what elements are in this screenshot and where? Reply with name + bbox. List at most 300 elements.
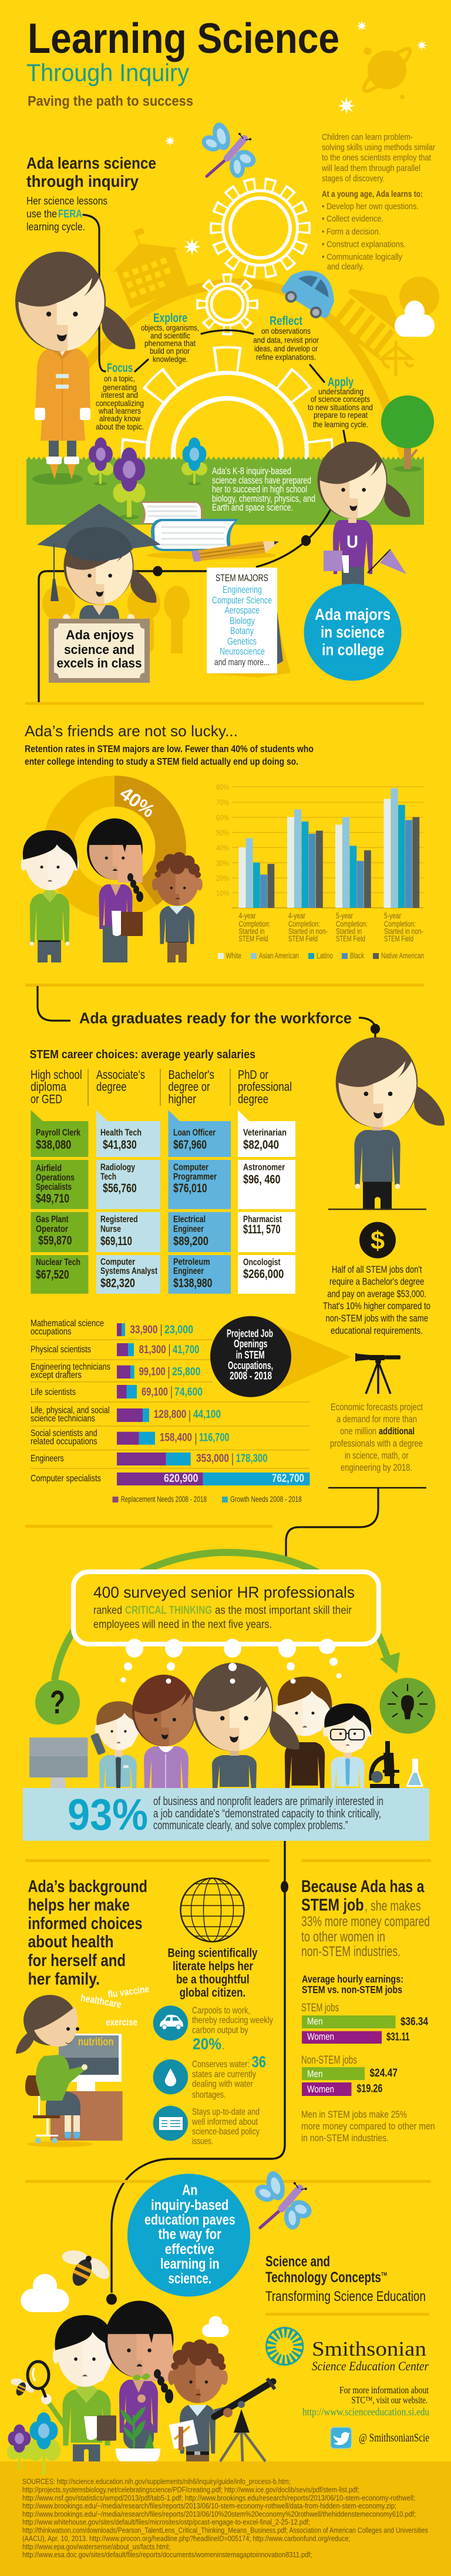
FERA path lines (83, 215, 346, 444)
axis labels: 70% (216, 798, 229, 807)
labels: Focus: Focus (107, 361, 133, 375)
category labels: Completion: (336, 920, 368, 928)
flowers (7, 2413, 60, 2475)
panel: STEM majors sign: Neuroscience (220, 646, 265, 657)
diploma sign (49, 619, 150, 683)
tagline: Paving the path to success (28, 93, 193, 109)
computer monitor (29, 1738, 87, 1788)
column: PhD careers: Veterinarian (243, 1128, 287, 1138)
divider (265, 2313, 429, 2316)
callout: HR professionals box: employees will need in the next five years. (93, 1619, 272, 1631)
icon: question mark circle (35, 1680, 80, 1725)
column: associate's careers: Systems Analyst (100, 1266, 158, 1276)
growth values (164, 1324, 268, 1465)
diploma sign: Ada enjoys (66, 628, 134, 642)
panel: STEM majors sign: Genetics (227, 636, 257, 647)
panel: STEM majors sign: and many more... (214, 658, 270, 668)
legend: Black (350, 951, 364, 960)
legend: Latino (317, 951, 333, 960)
text: K-8 preparation: her to succeed in high school (212, 484, 307, 495)
panel: sources footer: http://www.brookings.edu/~/media/research/files/reports/2013/06/10%20stem%20economy%20rothwell/thehiddenstemeconomy610.pdf; (22, 2510, 416, 2518)
divider (25, 2180, 431, 2183)
labels: Apply: the learning cycle. (313, 420, 368, 429)
panel: STEM majors sign: Biology (230, 615, 255, 626)
callout: HR professionals box: as the most important skill their (215, 1605, 352, 1617)
text: carpool: . (222, 2042, 224, 2052)
intro text: problem solving: • Construct explanations. (322, 240, 406, 249)
text: half of STEM jobs (323, 1264, 430, 1336)
table column headers: or GED (31, 1093, 62, 1106)
chart: hourly earnings: Women (307, 2031, 334, 2042)
chart: projected job openings (31, 1319, 310, 1504)
labels: Focus: already know (99, 414, 141, 423)
text: half of STEM jobs: and pay on average $53,000. (327, 1289, 426, 1300)
text: half of STEM jobs: educational requirements. (331, 1326, 423, 1336)
panel: sources footer (0, 2461, 451, 2576)
labels: Focus: interest and (101, 390, 138, 400)
text: economic forecasts: professionals with a degree (330, 1438, 423, 1449)
characters: three friends (21, 819, 203, 962)
heading: salaries: STEM career choices: average yearly salaries (29, 1048, 255, 1061)
bars group 2 (287, 810, 323, 908)
table column headers: degree or (168, 1081, 210, 1094)
labels: Explore: build on prior (150, 346, 190, 355)
icon: telescope (355, 1353, 400, 1394)
table column headers: higher (168, 1093, 196, 1106)
callout: inquiry-based education: effective (165, 2241, 214, 2258)
growth values: 116,700 (199, 1432, 229, 1444)
icon: dragonfly (252, 2169, 315, 2230)
panel: sources footer: http://www.epa.gov/watersense/about_us/facts.html; (22, 2543, 170, 2551)
column: high school careers: Nuclear Tech (36, 1257, 80, 1267)
text: water: shortages. (192, 2090, 226, 2100)
callout: projected job openings: Occupations, (228, 1360, 273, 1371)
heading: Ada's background: Ada’s background (28, 1877, 147, 1896)
chart: hourly earnings: Men (307, 2068, 323, 2079)
panel: 93 percent statistic: communicate clearly, and solve complex problems.” (153, 1819, 348, 1832)
icon: microscope (370, 1741, 399, 1788)
divider (25, 1525, 272, 1528)
decorative stars and planet (164, 21, 428, 256)
table column headers: PhD or (238, 1068, 268, 1082)
labels: Explore: and scientific (150, 331, 190, 340)
column: PhD careers: Astronomer (243, 1163, 285, 1173)
intro text: problem solving: At a young age, Ada learns to: (322, 190, 423, 199)
panel: 93 percent statistic: 93% (68, 1790, 148, 1839)
icon: question mark circle: ? (50, 1683, 65, 1720)
thought bubble dots on heads (166, 1663, 296, 1684)
text: economic forecasts: additional (379, 1426, 415, 1437)
panel: STEM majors sign: STEM MAJORS (216, 572, 268, 583)
growth values: 23,000 (164, 1324, 193, 1336)
Ada boots over grass (32, 457, 83, 485)
labels: Reflect: on observations (261, 326, 311, 336)
axis labels: 10% (216, 888, 229, 897)
text: economic forecasts (330, 1402, 423, 1473)
icon: carpool (153, 2005, 188, 2041)
category labels: 4-year (288, 911, 305, 920)
heading: friends: enter college intending to study a STEM field actually end up doing so. (25, 757, 298, 767)
character: college Ada (314, 442, 410, 586)
FERA text: use the (26, 208, 57, 220)
friend: boy in grey (152, 852, 203, 962)
column: associate's careers: Health Tech (100, 1128, 142, 1138)
heading: workforce: Ada graduates ready for the workforce (79, 1009, 352, 1027)
green arc arrow (55, 1552, 400, 1681)
row labels: Engineers (31, 1454, 64, 1464)
inline values for computer specialists: 762,700 (272, 1473, 304, 1485)
friend: boy in green (21, 830, 79, 962)
character: college Ada: U (346, 532, 358, 552)
growth values: 74,600 (174, 1386, 203, 1398)
text: carpool: 20% (193, 2035, 221, 2053)
icon: globe (181, 1878, 244, 1941)
clouds (21, 2274, 229, 2337)
column: bachelor's careers: $67,960 (173, 1138, 207, 1152)
column: high school careers: $59,870 (38, 1234, 72, 1247)
replacement values: 158,400 (160, 1432, 192, 1444)
growth values: 44,100 (193, 1408, 221, 1421)
diploma sign: excels in class (56, 656, 142, 670)
text: carpool: thereby reducing weekly (192, 2015, 273, 2025)
category labels: Started in (238, 927, 264, 935)
heading: Ada learns science: Ada learns science (26, 154, 156, 172)
panel: sources footer: http://projects.systemsbiology.net/celebratingscience/PDF/creating.pdf; http://www.ice.gov/doclib/sevis/pdf/stem-list.pdf; (22, 2486, 359, 2494)
background road and town silhouettes (70, 218, 439, 464)
chart: hourly earnings: STEM vs. non-STEM jobs (302, 1984, 402, 1995)
callout: projected job openings: Projected Job (227, 1328, 273, 1340)
callout: projected job openings: in STEM (236, 1349, 265, 1361)
person: man in brown (276, 1676, 334, 1788)
callout: HR professionals box: ranked (93, 1605, 122, 1617)
column: associate's careers: Computer (100, 1257, 135, 1267)
brand text: Smithsonian: STC™, visit our website. (351, 2394, 428, 2406)
text: water: states are currently (192, 2069, 256, 2079)
divider (25, 702, 424, 705)
labels: Reflect: Reflect (270, 314, 302, 328)
chart: 40 percent donut: 40% (116, 782, 159, 821)
text: global citizen: be a thoughtful (176, 1973, 250, 1987)
FERA text: learning cycle. (26, 221, 85, 233)
axis labels: 40% (216, 843, 229, 852)
illustration: three young scientists (5, 2301, 275, 2475)
person: man on phone (90, 1701, 142, 1789)
ponytail (16, 2030, 34, 2054)
intro text: problem solving: to the ones scientists employ that (322, 153, 431, 163)
column: high school careers: $67,520 (36, 1268, 69, 1282)
bars group 4 (383, 789, 419, 908)
column: bachelor's careers: $138,980 (173, 1277, 213, 1290)
labels: Apply (308, 375, 373, 429)
chart: hourly earnings: Average hourly earnings: (302, 1973, 403, 1985)
table column headers: diploma (31, 1081, 66, 1094)
row separators (31, 1340, 310, 1468)
panel: STEM majors sign (207, 568, 291, 677)
column: associate's careers: Tech (100, 1172, 116, 1182)
callout: inquiry-based education: inquiry-based (151, 2197, 228, 2213)
heading: Ada's background: informed choices (28, 1914, 142, 1933)
panel: sources footer: http://www.esa.doc.gov/sites/default/files/reports/documents/womeninstemagaptoinnovation8311.pdf; (22, 2551, 312, 2559)
icon: tree (381, 395, 434, 472)
callout: inquiry-based education: An (182, 2182, 197, 2199)
category labels: 5-year (384, 911, 401, 920)
legend: Replacement Needs 2008 - 2018 (121, 1495, 207, 1504)
blue growth bars (122, 1323, 310, 1485)
large gear (217, 185, 304, 271)
title block (26, 15, 339, 109)
text: water: Conserves water: (192, 2060, 250, 2069)
column: bachelor's careers: Computer (173, 1163, 208, 1173)
tree base over grass (393, 457, 422, 472)
column: PhD careers: $266,000 (243, 1267, 284, 1281)
icon: books and pencil (141, 501, 279, 562)
heading: Ada's background: her family. (28, 1970, 100, 1989)
text: K-8 preparation: science classes have prepared (212, 475, 311, 486)
text: economic forecasts: in science, math, or (345, 1451, 409, 1461)
chart: hourly earnings (301, 1973, 428, 2096)
row labels: Engineering technicians (31, 1362, 110, 1372)
panel: sources footer: http://www.brookings.edu/~/media/research/files/reports/2013/06/10-stem-economy-rothwell/data-from-hidden-stem-economy.zip; (22, 2502, 396, 2510)
heading: STEM job pay: non-STEM industries. (301, 1944, 400, 1960)
row labels: Social scientists and (31, 1428, 97, 1438)
callout: projected job openings: Openings (234, 1338, 268, 1350)
huge gear (121, 346, 334, 459)
icon: water drop (153, 2060, 188, 2094)
small gear (202, 279, 253, 330)
path line: college to graduation (39, 509, 331, 702)
growth values: 178,300 (236, 1453, 268, 1465)
brand text: Smithsonian: For more information about (339, 2384, 429, 2396)
floating health words: healthcare (80, 1992, 122, 2010)
character: young Ada (11, 251, 135, 485)
column: high school careers: Operator (36, 1225, 68, 1235)
column: bachelor's careers: Loan Officer (173, 1128, 216, 1138)
chart: hourly earnings: $36.34 (400, 2016, 428, 2028)
column: associate's careers: $69,110 (100, 1235, 132, 1248)
labels: Explore: objects, organisms, (141, 323, 199, 333)
column: bachelor's careers: Petroleum (173, 1257, 210, 1267)
icon: dollar coin: $ (371, 1226, 385, 1255)
panel: STEM majors sign: Engineering (223, 584, 262, 595)
row labels: science technicians (31, 1414, 95, 1424)
labels: Focus: on a topic, (104, 374, 135, 383)
divider (25, 984, 424, 987)
heading: Ada's background: about health (28, 1933, 114, 1951)
axis and gridlines (232, 787, 423, 908)
text: economic forecasts: a demand for more than (336, 1414, 417, 1425)
axis labels: 60% (216, 813, 229, 822)
text: policy: issues. (192, 2136, 213, 2146)
icon: newspaper (153, 2106, 188, 2141)
floating health words (80, 1983, 150, 2028)
thought bubbles (121, 1639, 342, 1683)
small bee (5, 2374, 38, 2401)
column: bachelor's careers: $89,200 (173, 1235, 208, 1248)
path line: vertical to inquiry callout (106, 1841, 288, 2305)
column: associate's careers: $41,830 (103, 1138, 137, 1152)
chart: hourly earnings: Women (307, 2084, 334, 2095)
labels: Apply: Apply (328, 375, 354, 389)
text: global citizen: global citizen. (180, 1986, 245, 2000)
telescope (214, 2379, 275, 2461)
row labels: Computer specialists (31, 1474, 101, 1484)
category labels: Completion: (238, 920, 270, 928)
text: carpool: carbon output by (192, 2025, 248, 2035)
column: PhD careers: Pharmacist (243, 1215, 282, 1225)
icon: white cloud (395, 301, 435, 337)
text: half of STEM jobs: non-STEM jobs with the same (325, 1313, 428, 1324)
legend (218, 951, 424, 960)
replacement values: 81,300 (139, 1344, 166, 1356)
intro text: problem solving (321, 133, 435, 271)
text: global citizen: Being scientifically (168, 1947, 258, 1960)
replacement values: 99,100 (139, 1366, 166, 1378)
faded crowd (42, 586, 190, 653)
panel: grass band (26, 457, 424, 525)
callout: HR professionals box (73, 1572, 379, 1644)
labels: Reflect: ideas, and develop or (254, 344, 318, 353)
legend: Growth Needs 2008 - 2018 (230, 1495, 302, 1504)
table column headers: degree (96, 1081, 127, 1094)
callout: inquiry-based education: education paves (144, 2212, 235, 2228)
heading: friends: Ada’s friends are not so lucky... (25, 722, 238, 740)
labels: Explore: knowledge. (153, 354, 188, 364)
intro text: problem solving: stages of discovery. (322, 174, 385, 183)
text: half of STEM jobs: Half of all STEM jobs don't (332, 1264, 422, 1275)
column: PhD careers: $82,040 (243, 1138, 279, 1152)
category labels: STEM Field (384, 934, 413, 943)
text: K-8 preparation: biology, chemistry, physics, and (212, 494, 315, 504)
axis labels: 80% (216, 783, 229, 791)
table column headers: High school (31, 1068, 82, 1082)
row labels: Life scientists (31, 1387, 76, 1397)
bars group 3 (335, 817, 371, 908)
column: associate's careers: $82,320 (100, 1277, 135, 1290)
axis labels (216, 783, 229, 897)
panel: 93 percent statistic (23, 1788, 429, 1841)
subtitle: Through Inquiry (26, 59, 189, 86)
column: PhD careers: $96, 460 (243, 1173, 281, 1186)
FERA text: FERA (58, 208, 82, 220)
column: high school careers: Gas Plant (36, 1215, 69, 1225)
panel: sources footer: http://www.nsf.gov/statistics/wmpd/2013/pdf/tab5-1.pdf; http://www.brookings.edu/research/reports/2013/06/10-stem-economy-rothwell; (22, 2494, 415, 2502)
axis labels: 30% (216, 858, 229, 867)
icon: bee (51, 2241, 117, 2297)
column: high school careers (31, 1110, 88, 1294)
table column headers: Associate's (96, 1068, 145, 1082)
row labels: occupations (31, 1327, 72, 1337)
text: carpool: Carpools to work, (192, 2006, 250, 2016)
callout: inquiry-based education (127, 2174, 250, 2296)
icon: blue car (277, 260, 345, 324)
value separators (161, 1324, 233, 1465)
text: K-8 preparation: Earth and space science. (212, 502, 293, 513)
column: associate's careers: Registered (100, 1215, 138, 1225)
person: woman in lilac (129, 1675, 198, 1791)
column: high school careers: Payroll Clerk (36, 1128, 80, 1138)
labels: Focus: about the topic. (96, 422, 144, 431)
illustration: office team (29, 1663, 423, 1791)
brand text: Smithsonian: http://www.scienceeducation.si.edu (302, 2406, 429, 2418)
heading: friends: Retention rates in STEM majors are low. Fewer than 40% of students who (25, 744, 314, 754)
labels: Reflect: and data, revisit prior (253, 336, 319, 345)
labels: Apply: understanding (318, 387, 364, 396)
chart: 40 percent donut (58, 776, 186, 905)
desk (51, 2091, 123, 2141)
labels: Apply: prepare to repeat (314, 410, 368, 420)
heading: STEM job pay: STEM job (301, 1896, 364, 1915)
category labels: 5-year (336, 911, 353, 920)
column: PhD careers: Oncologist (243, 1257, 281, 1267)
replacement values: 128,800 (154, 1408, 186, 1421)
heading: STEM job pay (301, 1877, 430, 1960)
table column headers: degree (238, 1093, 268, 1106)
callout: Ada majors in science in college: Ada majors (315, 605, 391, 623)
boy with magnifier (28, 2315, 117, 2461)
text: men comparison: Men in STEM jobs make 25% (301, 2109, 407, 2120)
panel: STEM majors sign: Aerospace (224, 605, 260, 616)
callout: Ada majors in science in college: in science (321, 623, 385, 641)
category labels: STEM Field (336, 934, 365, 943)
projection beam (276, 1325, 351, 1391)
friend: girl in purple (87, 819, 143, 962)
growth values: 41,700 (173, 1344, 199, 1356)
icon: twitter (331, 2427, 351, 2448)
text: policy (191, 2107, 260, 2146)
labels: Focus: generating (103, 383, 137, 392)
chart: hourly earnings: STEM jobs (301, 2002, 339, 2014)
intro text: problem solving: • Collect evidence. (322, 214, 383, 224)
intro text: problem solving: • Develop her own questions. (322, 202, 419, 212)
row labels (31, 1319, 110, 1484)
text: economic forecasts: one million (340, 1426, 376, 1437)
labels: Focus (96, 361, 144, 431)
inline values for computer specialists: 620,900 (164, 1473, 198, 1485)
replacement values: 353,000 (196, 1453, 229, 1465)
panel: 93 percent statistic: a job candidate's “demonstrated capacity to think critically, (153, 1807, 381, 1820)
logo: Smithsonian sunburst (265, 2327, 304, 2366)
floating health words: flu vaccine (107, 1983, 150, 2000)
boy with telescope (168, 2339, 228, 2461)
chart: hourly earnings: $24.47 (369, 2067, 398, 2079)
column: PhD careers: $111, 570 (243, 1223, 281, 1236)
flowers (87, 437, 207, 519)
callout: projected job openings (210, 1316, 291, 1397)
category labels: Started in non- (384, 927, 423, 935)
callout: inquiry-based education: science. (168, 2270, 211, 2287)
text: half of STEM jobs: require a Bachelor's degree (329, 1277, 424, 1287)
replacement values (130, 1324, 229, 1465)
FERA text: Her science lessons (26, 195, 107, 207)
category labels: Started in non- (288, 927, 328, 935)
heading: Ada's background: for herself and (28, 1951, 126, 1970)
intro text: problem solving: will lead them through parallel (321, 164, 420, 173)
intro text: problem solving: Children can learn problem- (322, 133, 413, 142)
illustration: Ada at computer (16, 1995, 123, 2147)
labels: Focus: what learners (98, 406, 141, 415)
callout: HR professionals box: CRITICAL THINKING (125, 1605, 212, 1617)
text: economic forecasts: Economic forecasts project (331, 1402, 423, 1413)
person: Ada (189, 1663, 299, 1789)
category labels: Started in (336, 927, 362, 935)
axis labels: 20% (216, 874, 229, 883)
legend: Asian American (259, 951, 299, 960)
inline values for computer specialists (164, 1473, 304, 1485)
heading: Ada learns science: through inquiry (26, 172, 139, 190)
column: bachelor's careers (168, 1110, 231, 1294)
column: associate's careers (96, 1110, 160, 1294)
labels: Focus: conceptualizing (96, 398, 144, 408)
